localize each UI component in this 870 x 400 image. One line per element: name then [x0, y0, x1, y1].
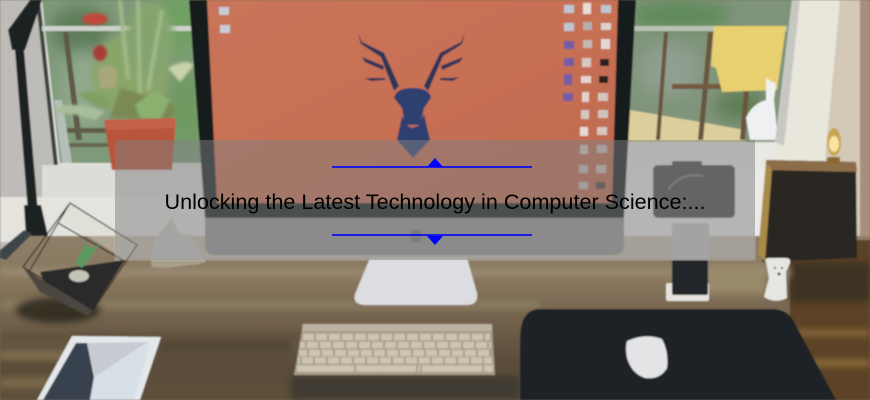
wooden block with bulb — [758, 128, 857, 262]
computer monitor — [189, 0, 636, 255]
phone on dock — [666, 223, 709, 301]
title overlay band — [115, 140, 755, 260]
icon: deer logo on screen — [358, 33, 465, 158]
icon: down triangle — [427, 236, 443, 245]
right window glass with balcony — [626, 0, 792, 142]
glass terrarium — [16, 203, 137, 323]
icon: light bulb — [827, 128, 841, 164]
desk surface — [0, 236, 870, 400]
wall and window frames — [0, 0, 870, 300]
crystal ornament — [151, 217, 205, 268]
lower divider with triangle — [332, 234, 532, 236]
icon: up triangle — [427, 158, 443, 167]
desk lamp arm — [8, 0, 48, 238]
white dog figurine — [764, 258, 790, 301]
keyboard — [294, 324, 495, 375]
black mouse pad — [520, 309, 836, 400]
potted plant — [55, 0, 194, 170]
left corner shadow — [0, 230, 32, 260]
tablet — [37, 336, 161, 400]
headline: Unlocking the Latest Technology in Computer Science:... — [165, 189, 705, 214]
window frame right edge — [775, 0, 800, 146]
white mouse — [626, 336, 667, 378]
camera on window sill — [653, 161, 735, 218]
desktop icons — [219, 3, 611, 189]
upper divider with triangle — [332, 166, 532, 168]
left window glass with garden — [42, 0, 208, 163]
monitor stand — [354, 258, 477, 305]
icon: apple logo — [410, 229, 422, 243]
